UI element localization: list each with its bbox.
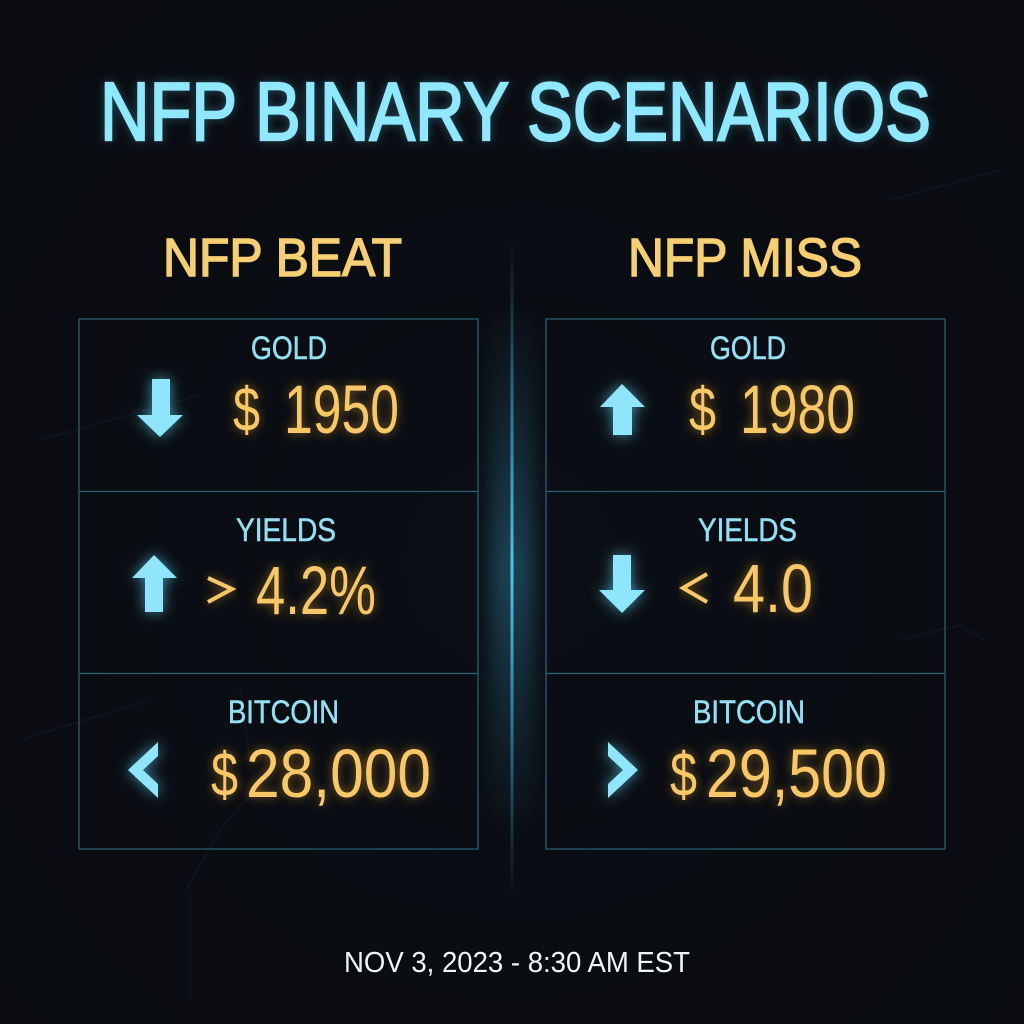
row: gold up: 1980 [740, 371, 855, 448]
row: yields up [132, 512, 376, 629]
date footer: NOV 3, 2023 - 8:30 AM EST [344, 947, 690, 979]
row: bitcoin right: BITCOIN [693, 694, 805, 730]
row: gold up: $ [689, 376, 716, 445]
row: gold down: $ [233, 376, 260, 445]
row: yields down [599, 512, 813, 627]
row: bitcoin left [128, 694, 431, 812]
row: yields down: YIELDS [698, 512, 797, 548]
heading: NFP miss: NFP MISS [628, 228, 862, 288]
row: gold down: 1950 [284, 371, 399, 448]
row: gold down [137, 330, 399, 448]
heading: NFP beat: NFP BEAT [163, 228, 402, 288]
row: yields up: 4.2% [256, 552, 376, 629]
row: bitcoin right: 29,500 [706, 735, 887, 812]
row: bitcoin left: $ [211, 741, 238, 810]
row: gold up: GOLD [710, 330, 786, 366]
panel: NFP miss [546, 319, 945, 849]
center divider [490, 240, 534, 900]
row: gold down: GOLD [251, 330, 327, 366]
row: gold up [600, 330, 855, 448]
row: yields up: YIELDS [236, 512, 336, 548]
panel: NFP beat [79, 319, 478, 849]
row: yields down: 4.0 [733, 550, 813, 627]
row: bitcoin left: 28,000 [246, 735, 431, 812]
row: bitcoin right: $ [670, 741, 697, 810]
row: bitcoin right [608, 694, 887, 812]
row: bitcoin left: BITCOIN [228, 694, 339, 730]
